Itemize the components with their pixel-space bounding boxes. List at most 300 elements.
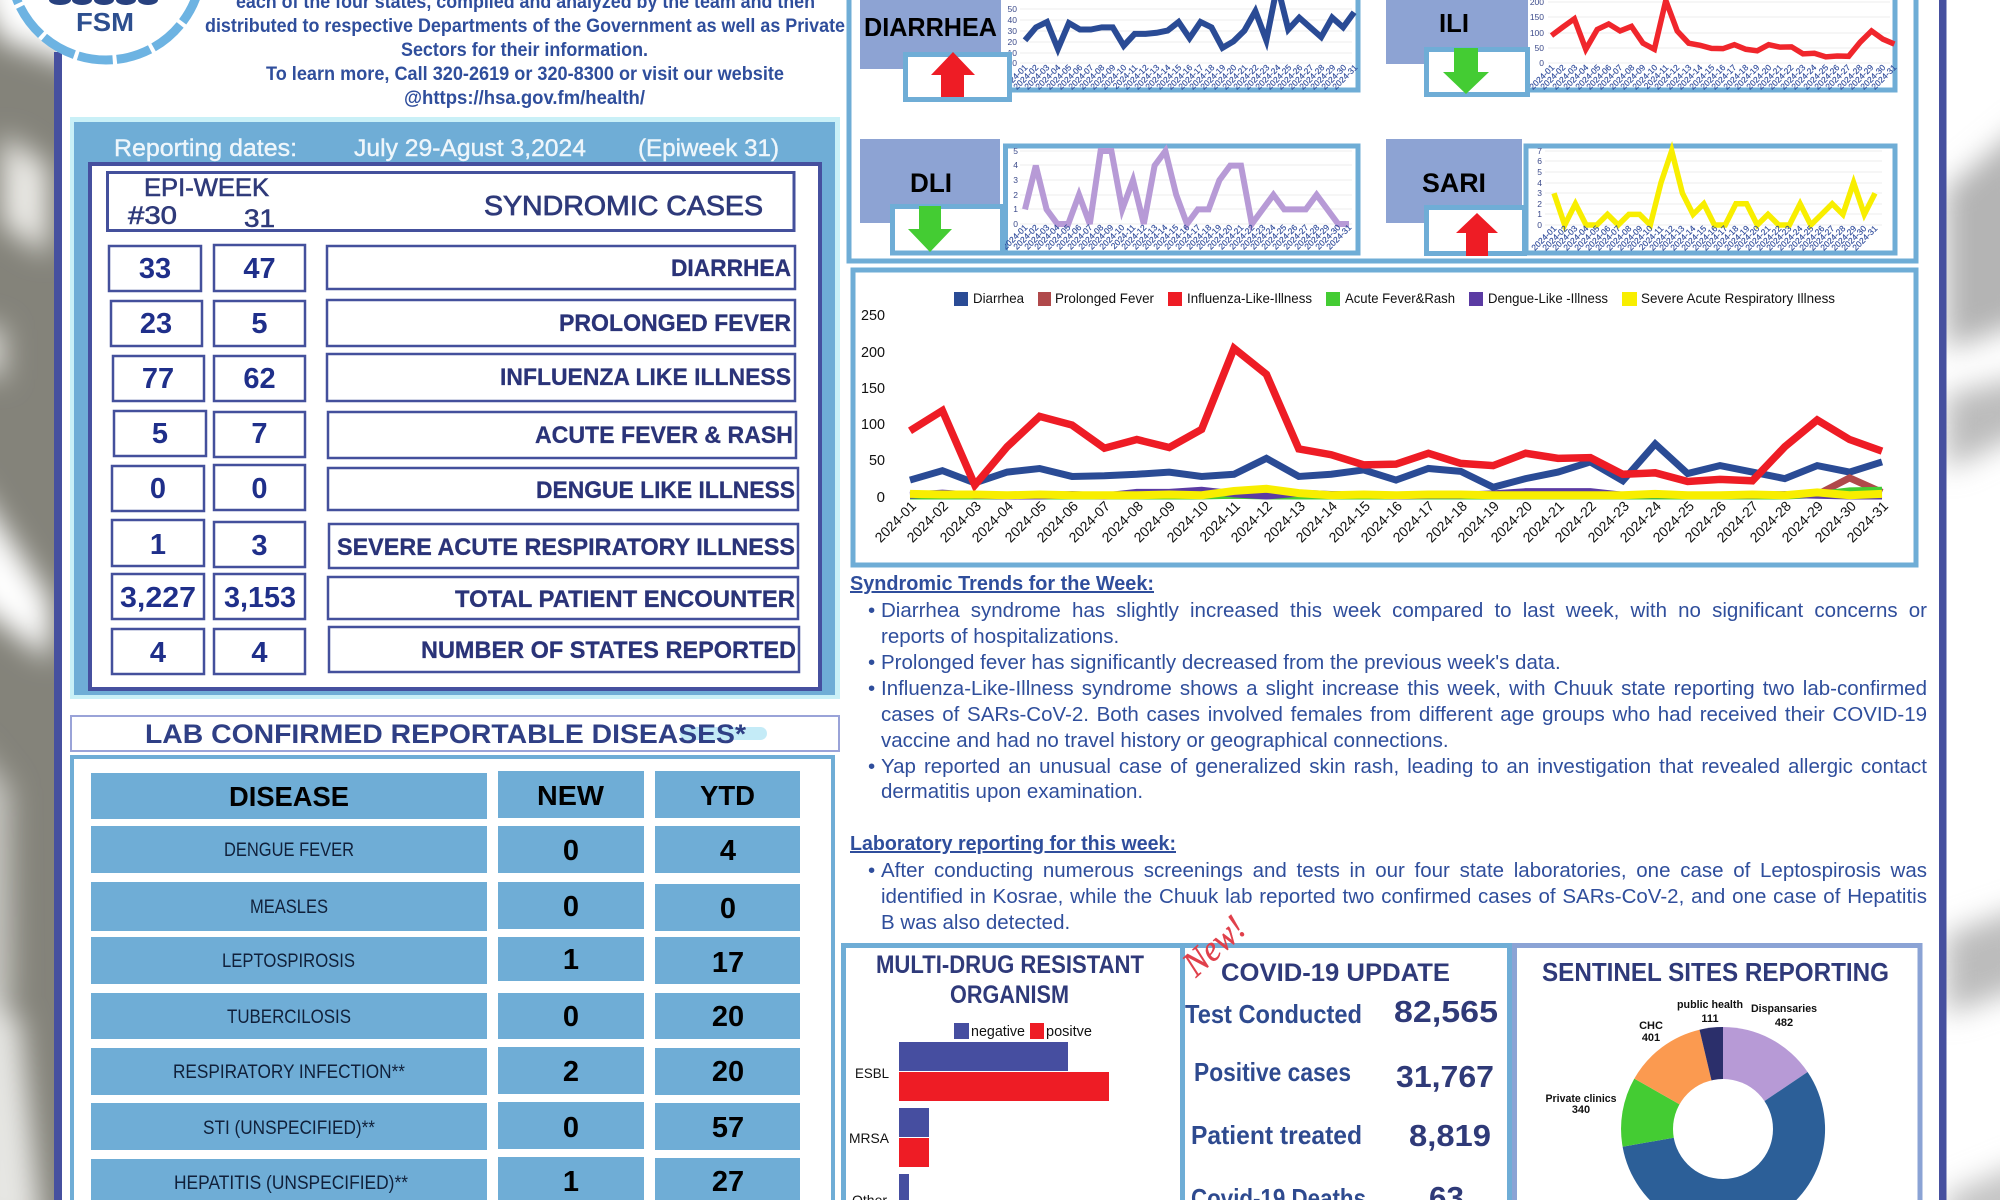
chart: dli mini: 2024-22 <box>1227 222 1257 251</box>
row: measles: 0 <box>563 891 579 923</box>
row: total patient encounter: 3,227 <box>120 582 196 614</box>
table head: YTD <box>700 780 755 811</box>
text: • <box>868 651 875 674</box>
chart: dli mini: 2024-21 <box>1216 222 1246 251</box>
row: hepatitis: 27 <box>712 1166 744 1198</box>
chart: dli mini: 2024-03 <box>1022 222 1052 251</box>
chart: diarrhea mini: 2024-01 <box>1000 62 1030 91</box>
x axis labels: 2024-09 <box>1130 498 1178 545</box>
text block: laboratory reporting bullets <box>868 859 1927 934</box>
row: tuberculosis: 0 <box>563 1001 579 1033</box>
chart: sari mini: 2024-23 <box>1764 223 1794 252</box>
chart: dli mini: 2024-02 <box>1011 222 1041 251</box>
x axis labels: 2024-08 <box>1098 498 1146 545</box>
table header: #30 <box>128 202 177 230</box>
x axis labels: 2024-02 <box>903 498 951 545</box>
title: ORGANISM <box>950 981 1069 1009</box>
chart: sari mini: 0 <box>1537 220 1542 230</box>
page frame left rule <box>54 52 62 1200</box>
chart: sari mini: 2024-08 <box>1604 223 1634 252</box>
logo <box>6 0 206 64</box>
chart: dli mini: 2024-10 <box>1097 222 1127 251</box>
chart: ili mini: 2024-10 <box>1630 62 1660 91</box>
label: dli <box>860 139 1000 223</box>
row: dengue fever <box>91 826 800 873</box>
row: hepatitis: HEPATITIS (UNSPECIFIED)** <box>174 1173 409 1194</box>
chart: sari mini: 4 <box>1537 178 1542 188</box>
chart: diarrhea mini: 2024-25 <box>1264 62 1294 91</box>
row: sti <box>91 1102 800 1150</box>
label: ili <box>1386 0 1528 64</box>
chart: sari mini: 2024-12 <box>1647 223 1677 252</box>
label: diarrhea: DIARRHEA <box>864 12 997 42</box>
chart: ili mini: 2024-16 <box>1698 62 1728 91</box>
chart: diarrhea mini: 2024-18 <box>1187 62 1217 91</box>
x axis labels: 2024-30 <box>1811 498 1859 545</box>
chart: ili mini: 2024-31 <box>1869 62 1899 91</box>
text block: syndromic trends bullets: vaccine and had no travel history or geographical connections. <box>881 729 1449 752</box>
stats: Patient treated <box>1191 1120 1362 1150</box>
stats: Test Conducted <box>1185 999 1362 1029</box>
y axis labels <box>861 307 885 506</box>
text block: syndromic trends bullets: dermatitis upon examination. <box>881 780 1143 803</box>
row: influenza like illness <box>113 354 795 401</box>
chart: diarrhea mini: 2024-04 <box>1033 62 1063 91</box>
chart: dli mini: 2024-20 <box>1205 222 1235 251</box>
chart: ili mini: 2024-13 <box>1664 62 1694 91</box>
chart: diarrhea mini: 2024-05 <box>1044 62 1074 91</box>
donut labels <box>1546 999 1817 1116</box>
chart: sari mini: 2024-30 <box>1839 223 1869 252</box>
chart: diarrhea mini: 2024-19 <box>1198 62 1228 91</box>
chart: sari mini: 2024-09 <box>1615 223 1645 252</box>
stats: 82,565 <box>1394 994 1498 1029</box>
icon: red up arrow sari <box>1426 208 1524 256</box>
stats: 8,819 <box>1409 1118 1491 1153</box>
stats: Positive cases <box>1194 1057 1351 1087</box>
row: acute fever and rash <box>114 411 796 458</box>
chart: diarrhea mini: 2024-14 <box>1143 62 1173 91</box>
chart: dli mini: 2024-26 <box>1270 222 1300 251</box>
x axis labels: 2024-18 <box>1422 498 1470 545</box>
chart: ili mini: 2024-04 <box>1561 62 1591 91</box>
background shadows right <box>1946 120 2000 1200</box>
legend: negative <box>971 1023 1025 1040</box>
row: number of states reported: 4 <box>150 637 166 669</box>
label: sari: SARI <box>1422 168 1486 198</box>
chart: diarrhea mini: 2024-27 <box>1286 62 1316 91</box>
chart: dli mini: 2024-17 <box>1173 222 1203 251</box>
x axis labels: 2024-07 <box>1065 498 1113 545</box>
row: diarrhea: 47 <box>243 253 276 285</box>
x axis labels: 2024-19 <box>1454 498 1502 545</box>
chart: sari mini: 2024-13 <box>1657 223 1687 252</box>
chart: sari mini: 3 <box>1537 188 1542 198</box>
chart: ili mini: 50 <box>1535 43 1544 53</box>
chart: ili mini: 2024-24 <box>1789 62 1819 91</box>
chart: diarrhea mini: 2024-21 <box>1220 62 1250 91</box>
chart: dli mini: 2024-18 <box>1184 222 1214 251</box>
chart: dli mini: 4 <box>1013 160 1018 170</box>
chart: diarrhea mini: 2024-10 <box>1099 62 1129 91</box>
intro text: distributed to respective Departments of the Government as well as Private <box>205 16 845 37</box>
x axis labels: 2024-13 <box>1260 498 1308 545</box>
x axis labels <box>871 498 1891 545</box>
chart: diarrhea mini: 2024-16 <box>1165 62 1195 91</box>
row: leptospirosis: LEPTOSPIROSIS <box>222 951 355 972</box>
x axis labels: 2024-04 <box>968 498 1016 545</box>
background shadows left <box>0 0 56 1200</box>
row: number of states reported: 4 <box>251 637 268 669</box>
reporting dates: July 29-Agust 3,2024 <box>354 135 586 162</box>
row: dengue like illness: 0 <box>251 473 268 505</box>
row: severe acute respiratory illness: 3 <box>251 530 268 562</box>
chart: ili mini: 2024-19 <box>1732 62 1762 91</box>
row: total patient encounter: 3,153 <box>224 582 296 614</box>
chart: diarrhea mini: 2024-13 <box>1132 62 1162 91</box>
callout: new: New! <box>1174 907 1253 985</box>
chart: diarrhea mini: 2024-29 <box>1308 62 1338 91</box>
chart: sari mini: 2024-01 <box>1529 223 1559 252</box>
legend: Prolonged Fever <box>1055 290 1154 306</box>
legend: Severe Acute Respiratory Illness <box>1641 290 1835 306</box>
row: hepatitis: 1 <box>563 1166 579 1198</box>
label: dli: DLI <box>910 168 952 198</box>
text block: syndromic trends bullets: Diarrhea syndrome has slightly increased this week compared to last week, with no significant concerns or <box>881 599 1927 622</box>
chart: dli mini: 2024-23 <box>1238 222 1268 251</box>
chart: diarrhea mini: 2024-11 <box>1111 62 1140 91</box>
x axis labels: 2024-26 <box>1681 498 1729 545</box>
chart: dli mini: 5 <box>1013 146 1018 156</box>
row: respiratory infection <box>91 1047 800 1095</box>
chart: sari mini: 2024-02 <box>1540 223 1570 252</box>
label: sari <box>1386 139 1522 223</box>
chart: ili mini: 2024-01 <box>1527 62 1557 91</box>
intro text <box>205 0 845 109</box>
text block: syndromic trends bullets: Prolonged fever has significantly decreased from the previous week's data. <box>881 651 1561 674</box>
chart: ili mini: 2024-06 <box>1584 62 1614 91</box>
row: prolonged fever: PROLONGED FEVER <box>559 310 791 337</box>
chart: dli mini: 2024-13 <box>1130 222 1160 251</box>
chart: sari mini <box>1526 146 1895 253</box>
intro text: To learn more, Call 320-2619 or 320-8300 or visit our website <box>266 64 784 85</box>
row: measles <box>91 882 800 931</box>
x axis labels: 2024-31 <box>1843 498 1891 545</box>
text block: syndromic trends bullets: reports of hospitalizations. <box>881 625 1119 648</box>
row: sti: STI (UNSPECIFIED)** <box>203 1118 376 1139</box>
chart: ili mini: 2024-22 <box>1766 62 1796 91</box>
legend: positve <box>1046 1023 1092 1040</box>
row: tuberculosis <box>91 993 800 1039</box>
chart: dli mini: 2024-05 <box>1043 222 1073 251</box>
chart: sari mini: 2024-29 <box>1829 223 1859 252</box>
x axis labels: 2024-23 <box>1584 498 1632 545</box>
chart: ili mini: 2024-03 <box>1550 62 1580 91</box>
chart: ili mini: 150 <box>1530 12 1544 22</box>
chart: sari mini: 2024-11 <box>1637 223 1666 252</box>
chart: dli mini: 3 <box>1013 175 1018 185</box>
row: dengue fever: 0 <box>563 835 579 867</box>
row: diarrhea: DIARRHEA <box>671 255 791 282</box>
intro text: Sectors for their information. <box>401 40 648 61</box>
x axis labels: 2024-14 <box>1292 498 1340 545</box>
row: total patient encounter: TOTAL PATIENT ENCOUNTER <box>455 586 795 613</box>
row: acute fever and rash: 5 <box>152 418 168 450</box>
panel: mini trend charts <box>849 0 1916 261</box>
label: diarrhea <box>860 0 1001 69</box>
text block: laboratory reporting bullets: identified in Kosrae, while the Chuuk lab reported two confirmed cases of SARs-CoV-2, and one case of Hepatitis <box>881 885 1927 908</box>
chart: ili mini <box>1510 0 1899 91</box>
panel: multi-drug resistant organism <box>844 946 1182 1200</box>
logo: FSM <box>76 7 134 37</box>
label: ili: ILI <box>1439 8 1469 38</box>
chart: sari mini: 5 <box>1537 167 1542 177</box>
table head <box>91 771 800 819</box>
row: measles: 0 <box>720 893 736 925</box>
chart: ili mini: 2024-05 <box>1573 62 1603 91</box>
legend: Dengue-Like -Illness <box>1488 290 1608 306</box>
donut labels: CHC <box>1639 1020 1663 1032</box>
table header <box>108 172 794 233</box>
x axis labels: 2024-03 <box>936 498 984 545</box>
chart: sari mini: 2024-25 <box>1786 223 1816 252</box>
text: • <box>868 677 875 700</box>
x axis labels: 2024-22 <box>1551 498 1599 545</box>
chart: diarrhea mini: 0 <box>1012 58 1017 68</box>
row: respiratory infection: RESPIRATORY INFECTION** <box>173 1062 406 1083</box>
row: diarrhea <box>109 245 795 291</box>
text: • <box>868 859 875 882</box>
chart: dli mini: 2024-12 <box>1119 222 1149 251</box>
row: severe acute respiratory illness: 1 <box>150 529 166 561</box>
chart: dli mini: 2024-24 <box>1248 222 1278 251</box>
heading: laboratory reporting: Laboratory reporting for this week: <box>850 833 1176 855</box>
table header: 31 <box>244 205 275 233</box>
chart: ili mini: 2024-20 <box>1744 62 1774 91</box>
chart: ili mini: 2024-28 <box>1835 62 1865 91</box>
text: • <box>868 599 875 622</box>
chart: sari mini: 2024-04 <box>1561 223 1591 252</box>
chart: dli mini: 2024-14 <box>1140 222 1170 251</box>
text block: syndromic trends bullets: cases of SARs-CoV-2. Both cases involved females from different age groups who had received their COVID-19 <box>881 703 1927 726</box>
x axis labels: 2024-11 <box>1196 498 1243 545</box>
row: prolonged fever: 23 <box>140 308 172 340</box>
legend: Acute Fever&Rash <box>1345 290 1455 306</box>
chart: ili mini: 2024-11 <box>1642 62 1671 91</box>
icon: red up arrow diarrhea <box>906 52 1010 100</box>
row: hepatitis <box>91 1157 800 1200</box>
chart: dli mini: 2024-29 <box>1302 222 1332 251</box>
reporting dates: Reporting dates: <box>114 135 297 162</box>
chart: sari mini: 2024-21 <box>1743 223 1773 252</box>
panel: sentinel sites reporting <box>1514 946 1920 1200</box>
row: leptospirosis: 1 <box>563 944 579 976</box>
y axis labels: 50 <box>869 452 885 469</box>
table head: NEW <box>537 780 605 811</box>
panel: lab confirmed title: LAB CONFIRMED REPORTABLE DISEASES* <box>145 719 747 749</box>
x axis labels: 2024-05 <box>1001 498 1049 545</box>
chart: diarrhea mini: 2024-31 <box>1330 62 1360 91</box>
donut labels: 482 <box>1775 1017 1793 1029</box>
x axis labels: 2024-16 <box>1357 498 1405 545</box>
chart: diarrhea mini: 2024-08 <box>1077 62 1107 91</box>
chart: dli mini: 2024-16 <box>1162 222 1192 251</box>
chart: sari mini: 2024-14 <box>1668 223 1698 252</box>
chart: dli mini: 2024-15 <box>1151 222 1181 251</box>
x axis labels: 2024-06 <box>1033 498 1081 545</box>
row: acute fever and rash: ACUTE FEVER & RASH <box>535 422 793 449</box>
row: prolonged fever: 5 <box>251 308 268 340</box>
y axis labels: 100 <box>861 416 885 433</box>
table head: DISEASE <box>229 781 349 812</box>
text block: laboratory reporting bullets: After conducting numerous screenings and tests in our four state laboratories, one case of Leptospirosis was <box>881 859 1927 882</box>
stats <box>1185 994 1498 1200</box>
chart: diarrhea mini: 2024-24 <box>1253 62 1283 91</box>
panel: covid-19 update <box>1182 946 1510 1200</box>
chart: sari mini: 2024-26 <box>1797 223 1827 252</box>
row: dengue like illness: DENGUE LIKE ILLNESS <box>536 477 795 504</box>
chart: dli mini: 2 <box>1013 190 1018 200</box>
chart: sari mini: 2024-31 <box>1850 223 1880 252</box>
chart: sari mini: 2024-06 <box>1583 223 1613 252</box>
row: influenza like illness: 77 <box>142 363 174 395</box>
icon: green down arrow dli <box>892 206 1002 253</box>
donut labels: 340 <box>1572 1104 1590 1116</box>
row: respiratory infection: 20 <box>712 1056 744 1088</box>
chart: diarrhea mini: 2024-12 <box>1121 62 1151 91</box>
chart: ili mini: 2024-26 <box>1812 62 1842 91</box>
row: leptospirosis: 17 <box>712 947 744 979</box>
x axis labels: 2024-29 <box>1778 498 1826 545</box>
chart: dli mini: 2024-19 <box>1194 222 1224 251</box>
stats: 31,767 <box>1396 1059 1494 1094</box>
chart: dli mini: 2024-11 <box>1109 222 1138 251</box>
row: influenza like illness: INFLUENZA LIKE ILLNESS <box>500 364 791 391</box>
text block: laboratory reporting bullets: B was also detected. <box>881 911 1070 934</box>
chart: dli mini: 2024-07 <box>1065 222 1095 251</box>
chart: diarrhea mini: 10 <box>1008 48 1017 58</box>
chart: ili mini: 100 <box>1530 28 1544 38</box>
chart: ili mini: 2024-15 <box>1687 62 1717 91</box>
row: influenza like illness: 62 <box>243 363 276 395</box>
chart: sari mini: 2024-07 <box>1593 223 1623 252</box>
legend <box>954 1023 1092 1040</box>
chart: sari mini: 2024-19 <box>1722 223 1752 252</box>
chart: sari mini: 2024-18 <box>1711 223 1741 252</box>
chart: diarrhea mini: 30 <box>1008 26 1017 36</box>
chart: sari mini: 2024-05 <box>1572 223 1602 252</box>
chart: dli mini: 2024-06 <box>1054 222 1084 251</box>
chart: sari mini: 6 <box>1537 156 1542 166</box>
chart: sari mini: 2024-24 <box>1775 223 1805 252</box>
chart: diarrhea mini: 2024-15 <box>1154 62 1184 91</box>
chart: dli mini: 2024-01 <box>1000 222 1030 251</box>
x axis labels: 2024-15 <box>1325 498 1373 545</box>
chart: sari mini: 2024-28 <box>1818 223 1848 252</box>
chart: diarrhea mini: 2024-06 <box>1055 62 1085 91</box>
x axis labels: 2024-24 <box>1616 498 1664 545</box>
row: total patient encounter <box>112 574 798 619</box>
chart: diarrhea mini <box>990 0 1360 91</box>
chart: dli mini: 2024-27 <box>1281 222 1311 251</box>
y axis labels: 200 <box>861 344 885 361</box>
chart: diarrhea mini: 2024-22 <box>1231 62 1261 91</box>
legend: Influenza-Like-Illness <box>1187 290 1312 306</box>
x axis labels: 2024-21 <box>1519 498 1567 545</box>
text block: syndromic trends bullets: Influenza-Like-Illness syndrome shows a slight increase this week, with Chuuk state reporting two lab-confirmed <box>881 677 1927 700</box>
x axis labels: 2024-10 <box>1163 498 1211 545</box>
donut labels: 111 <box>1701 1013 1719 1025</box>
chart: ili mini: 2024-09 <box>1618 62 1648 91</box>
donut labels: public health <box>1677 999 1743 1011</box>
chart: dli mini: 2024-04 <box>1032 222 1062 251</box>
x axis labels: 2024-12 <box>1227 498 1275 545</box>
chart: sari mini: 2024-22 <box>1754 223 1784 252</box>
table header: EPI-WEEK <box>144 174 269 202</box>
chart: diarrhea mini: 2024-28 <box>1297 62 1327 91</box>
bars: MRSA <box>849 1130 890 1146</box>
x axis labels: 2024-20 <box>1487 498 1535 545</box>
chart: dli mini: 2024-30 <box>1313 222 1343 251</box>
icon: green down arrow ili <box>1426 48 1528 94</box>
row: measles: MEASLES <box>250 897 328 918</box>
chart: ili mini: 2024-23 <box>1778 62 1808 91</box>
row: dengue fever: DENGUE FEVER <box>224 840 354 861</box>
chart: ili mini: 2024-12 <box>1652 62 1682 91</box>
row: tuberculosis: 20 <box>712 1001 744 1033</box>
y axis labels: 150 <box>861 380 885 397</box>
row: sti: 0 <box>563 1112 579 1144</box>
chart: ili mini: 2024-21 <box>1755 62 1785 91</box>
chart: sari mini: 2024-17 <box>1700 223 1730 252</box>
row: leptospirosis <box>91 937 800 984</box>
chart: ili mini: 2024-30 <box>1858 62 1888 91</box>
reporting dates <box>114 135 779 162</box>
x axis labels: 2024-01 <box>871 498 919 545</box>
chart: diarrhea mini: 50 <box>1008 4 1017 14</box>
chart: sari mini: 2024-16 <box>1690 223 1720 252</box>
chart: diarrhea mini: 2024-26 <box>1275 62 1305 91</box>
chart: ili mini: 2024-17 <box>1709 62 1739 91</box>
panel: syndromic cases <box>70 117 840 699</box>
row: dengue like illness <box>112 465 798 511</box>
chart: sari mini: 2024-03 <box>1550 223 1580 252</box>
legend <box>954 290 1835 306</box>
bars: ESBL <box>855 1065 889 1081</box>
chart: sari mini: 2024-27 <box>1807 223 1837 252</box>
chart: ili mini: 2024-29 <box>1846 62 1876 91</box>
legend: Diarrhea <box>973 290 1024 306</box>
chart: ili mini: 0 <box>1539 58 1544 68</box>
x axis labels: 2024-27 <box>1713 498 1761 545</box>
data lines <box>910 348 1882 496</box>
text block: syndromic trends bullets: Yap reported an unusual case of generalized skin rash, leading to an investigation that revealed allergic contact <box>881 755 1927 778</box>
donut chart <box>1621 1027 1825 1200</box>
chart: diarrhea mini: 2024-03 <box>1022 62 1052 91</box>
chart: sari mini: 7 <box>1537 146 1542 156</box>
chart: sari mini: 2024-15 <box>1679 223 1709 252</box>
chart: dli mini: 2024-31 <box>1324 222 1354 251</box>
title: MULTI-DRUG RESISTANT <box>876 951 1144 979</box>
row: dengue fever: 4 <box>720 835 736 867</box>
donut labels: Private clinics <box>1546 1093 1616 1105</box>
chart: ili mini: 2024-02 <box>1538 62 1568 91</box>
chart: ili mini: 2024-07 <box>1595 62 1625 91</box>
row: severe acute respiratory illness <box>112 520 798 568</box>
row: severe acute respiratory illness: SEVERE ACUTE RESPIRATORY ILLNESS <box>337 534 795 561</box>
reporting dates: (Epiweek 31) <box>638 135 779 162</box>
chart: diarrhea mini: 2024-30 <box>1319 62 1349 91</box>
